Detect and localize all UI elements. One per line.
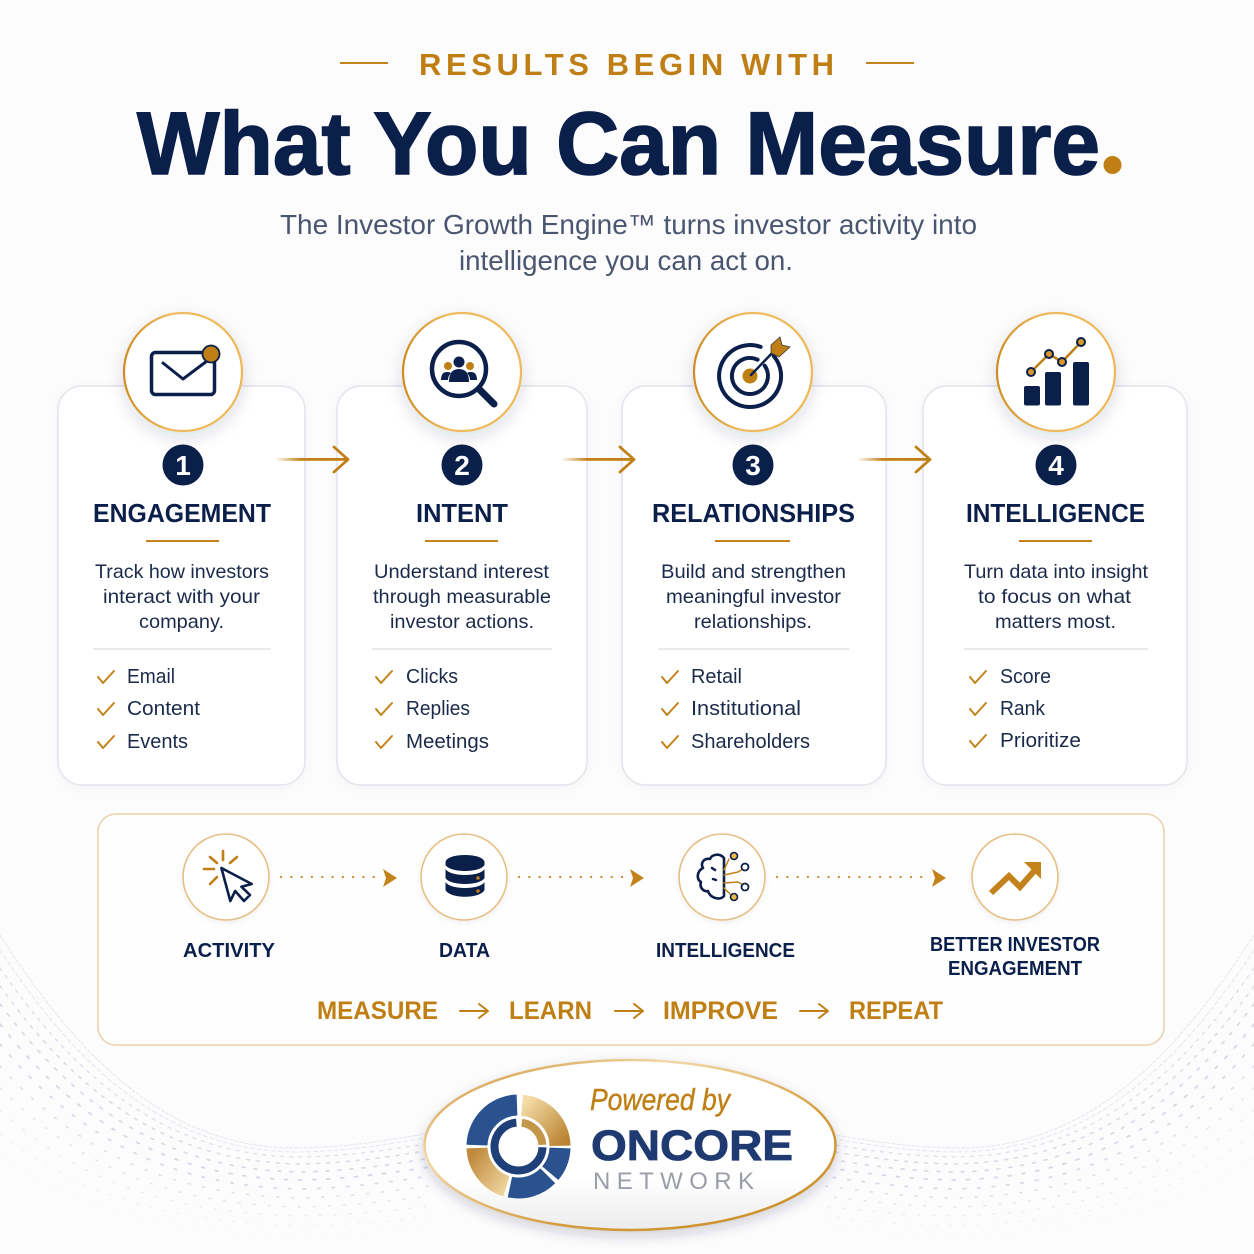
description <box>661 561 846 633</box>
checklist: Email <box>127 666 175 688</box>
label: intelligence: INTELLIGENCE <box>656 940 795 962</box>
checklist: Retail <box>691 666 742 688</box>
checklist: Content <box>127 698 200 720</box>
logo mark <box>477 1105 560 1188</box>
heading: relationships: RELATIONSHIPS <box>652 498 855 528</box>
checklist <box>662 666 810 753</box>
icon: target with dart <box>694 313 812 431</box>
checklist <box>970 666 1081 752</box>
step number 2: 2 <box>454 450 470 481</box>
step number 3: 3 <box>745 450 761 481</box>
panel: engagement <box>58 313 305 785</box>
subtitle <box>280 209 977 276</box>
icon: brain circuit <box>679 834 765 920</box>
checklist <box>376 666 489 753</box>
description: Track how investors <box>95 561 269 583</box>
step number 2 <box>442 444 482 486</box>
network: NETWORK <box>593 1168 754 1195</box>
checklist <box>98 666 200 753</box>
description: matters most. <box>995 611 1116 633</box>
description: Build and strengthen <box>661 561 846 583</box>
cycle: measure learn improve repeat: LEARN <box>509 997 592 1025</box>
checklist: Clicks <box>406 666 458 688</box>
step number 4: 4 <box>1048 450 1064 481</box>
description: company. <box>139 611 224 633</box>
dotted arrow <box>777 869 946 887</box>
arrow: engagement to intent <box>275 447 348 472</box>
step number 1: 1 <box>175 450 191 481</box>
checklist: Replies <box>406 698 470 720</box>
heading: intelligence: INTELLIGENCE <box>966 498 1145 528</box>
heading: engagement: ENGAGEMENT <box>93 498 271 528</box>
arrow: relationships to intelligence <box>857 447 930 472</box>
dotted arrow <box>281 869 397 887</box>
cycle: measure learn improve repeat: MEASURE <box>317 997 438 1025</box>
step number 1 <box>162 444 204 486</box>
label: better investor engagement <box>930 934 1100 980</box>
subtitle: intelligence you can act on. <box>459 245 793 276</box>
description <box>95 561 269 633</box>
description: interact with your <box>103 586 261 608</box>
subtitle: The Investor Growth Engine™ turns investor activity into <box>280 209 977 240</box>
checklist: Rank <box>1000 698 1046 720</box>
description: through measurable <box>373 586 551 608</box>
title period <box>1104 156 1122 174</box>
panel: relationships <box>622 313 886 785</box>
description <box>964 561 1149 633</box>
icon: bar chart with trend line <box>997 313 1115 431</box>
description: to focus on what <box>978 586 1132 608</box>
checklist: Prioritize <box>1000 730 1081 752</box>
panel: intent <box>337 313 587 785</box>
icon: rising arrow <box>972 834 1058 920</box>
badge: powered by oncore network <box>424 1060 836 1230</box>
checklist: Meetings <box>406 731 489 753</box>
label: data: DATA <box>439 940 490 962</box>
step number 3 <box>732 444 774 486</box>
description <box>373 561 551 633</box>
cycle: measure learn improve repeat: REPEAT <box>849 997 943 1025</box>
description: relationships. <box>694 611 812 633</box>
dotted arrow <box>519 869 644 887</box>
label: activity: ACTIVITY <box>183 940 276 962</box>
arrow: intent to relationships <box>561 447 634 472</box>
panel: intelligence <box>923 313 1187 785</box>
description: Understand interest <box>374 561 550 583</box>
checklist: Score <box>1000 666 1051 688</box>
description: investor actions. <box>390 611 534 633</box>
label: better investor engagement: ENGAGEMENT <box>948 958 1082 980</box>
icon: magnifier with people <box>403 313 521 431</box>
icon: database <box>421 834 507 920</box>
eyebrow heading: RESULTS BEGIN WITH <box>419 47 834 82</box>
icon: cursor click <box>183 834 269 920</box>
checklist: Events <box>127 731 188 753</box>
cycle: measure learn improve repeat: IMPROVE <box>663 997 778 1025</box>
label: better investor engagement: BETTER INVESTOR <box>930 934 1100 956</box>
checklist: Shareholders <box>691 731 810 753</box>
panel: process flow <box>98 814 1164 1045</box>
title: What You Can Measure <box>137 93 1100 193</box>
description: meaningful investor <box>666 586 842 608</box>
icon: envelope <box>124 313 242 431</box>
heading: intent: INTENT <box>416 498 508 528</box>
oncore: ONCORE <box>591 1122 793 1170</box>
checklist: Institutional <box>691 698 801 720</box>
cycle: measure learn improve repeat <box>317 997 943 1025</box>
step number 4 <box>1036 444 1076 486</box>
powered by: Powered by <box>590 1082 732 1117</box>
description: Turn data into insight <box>964 561 1149 583</box>
